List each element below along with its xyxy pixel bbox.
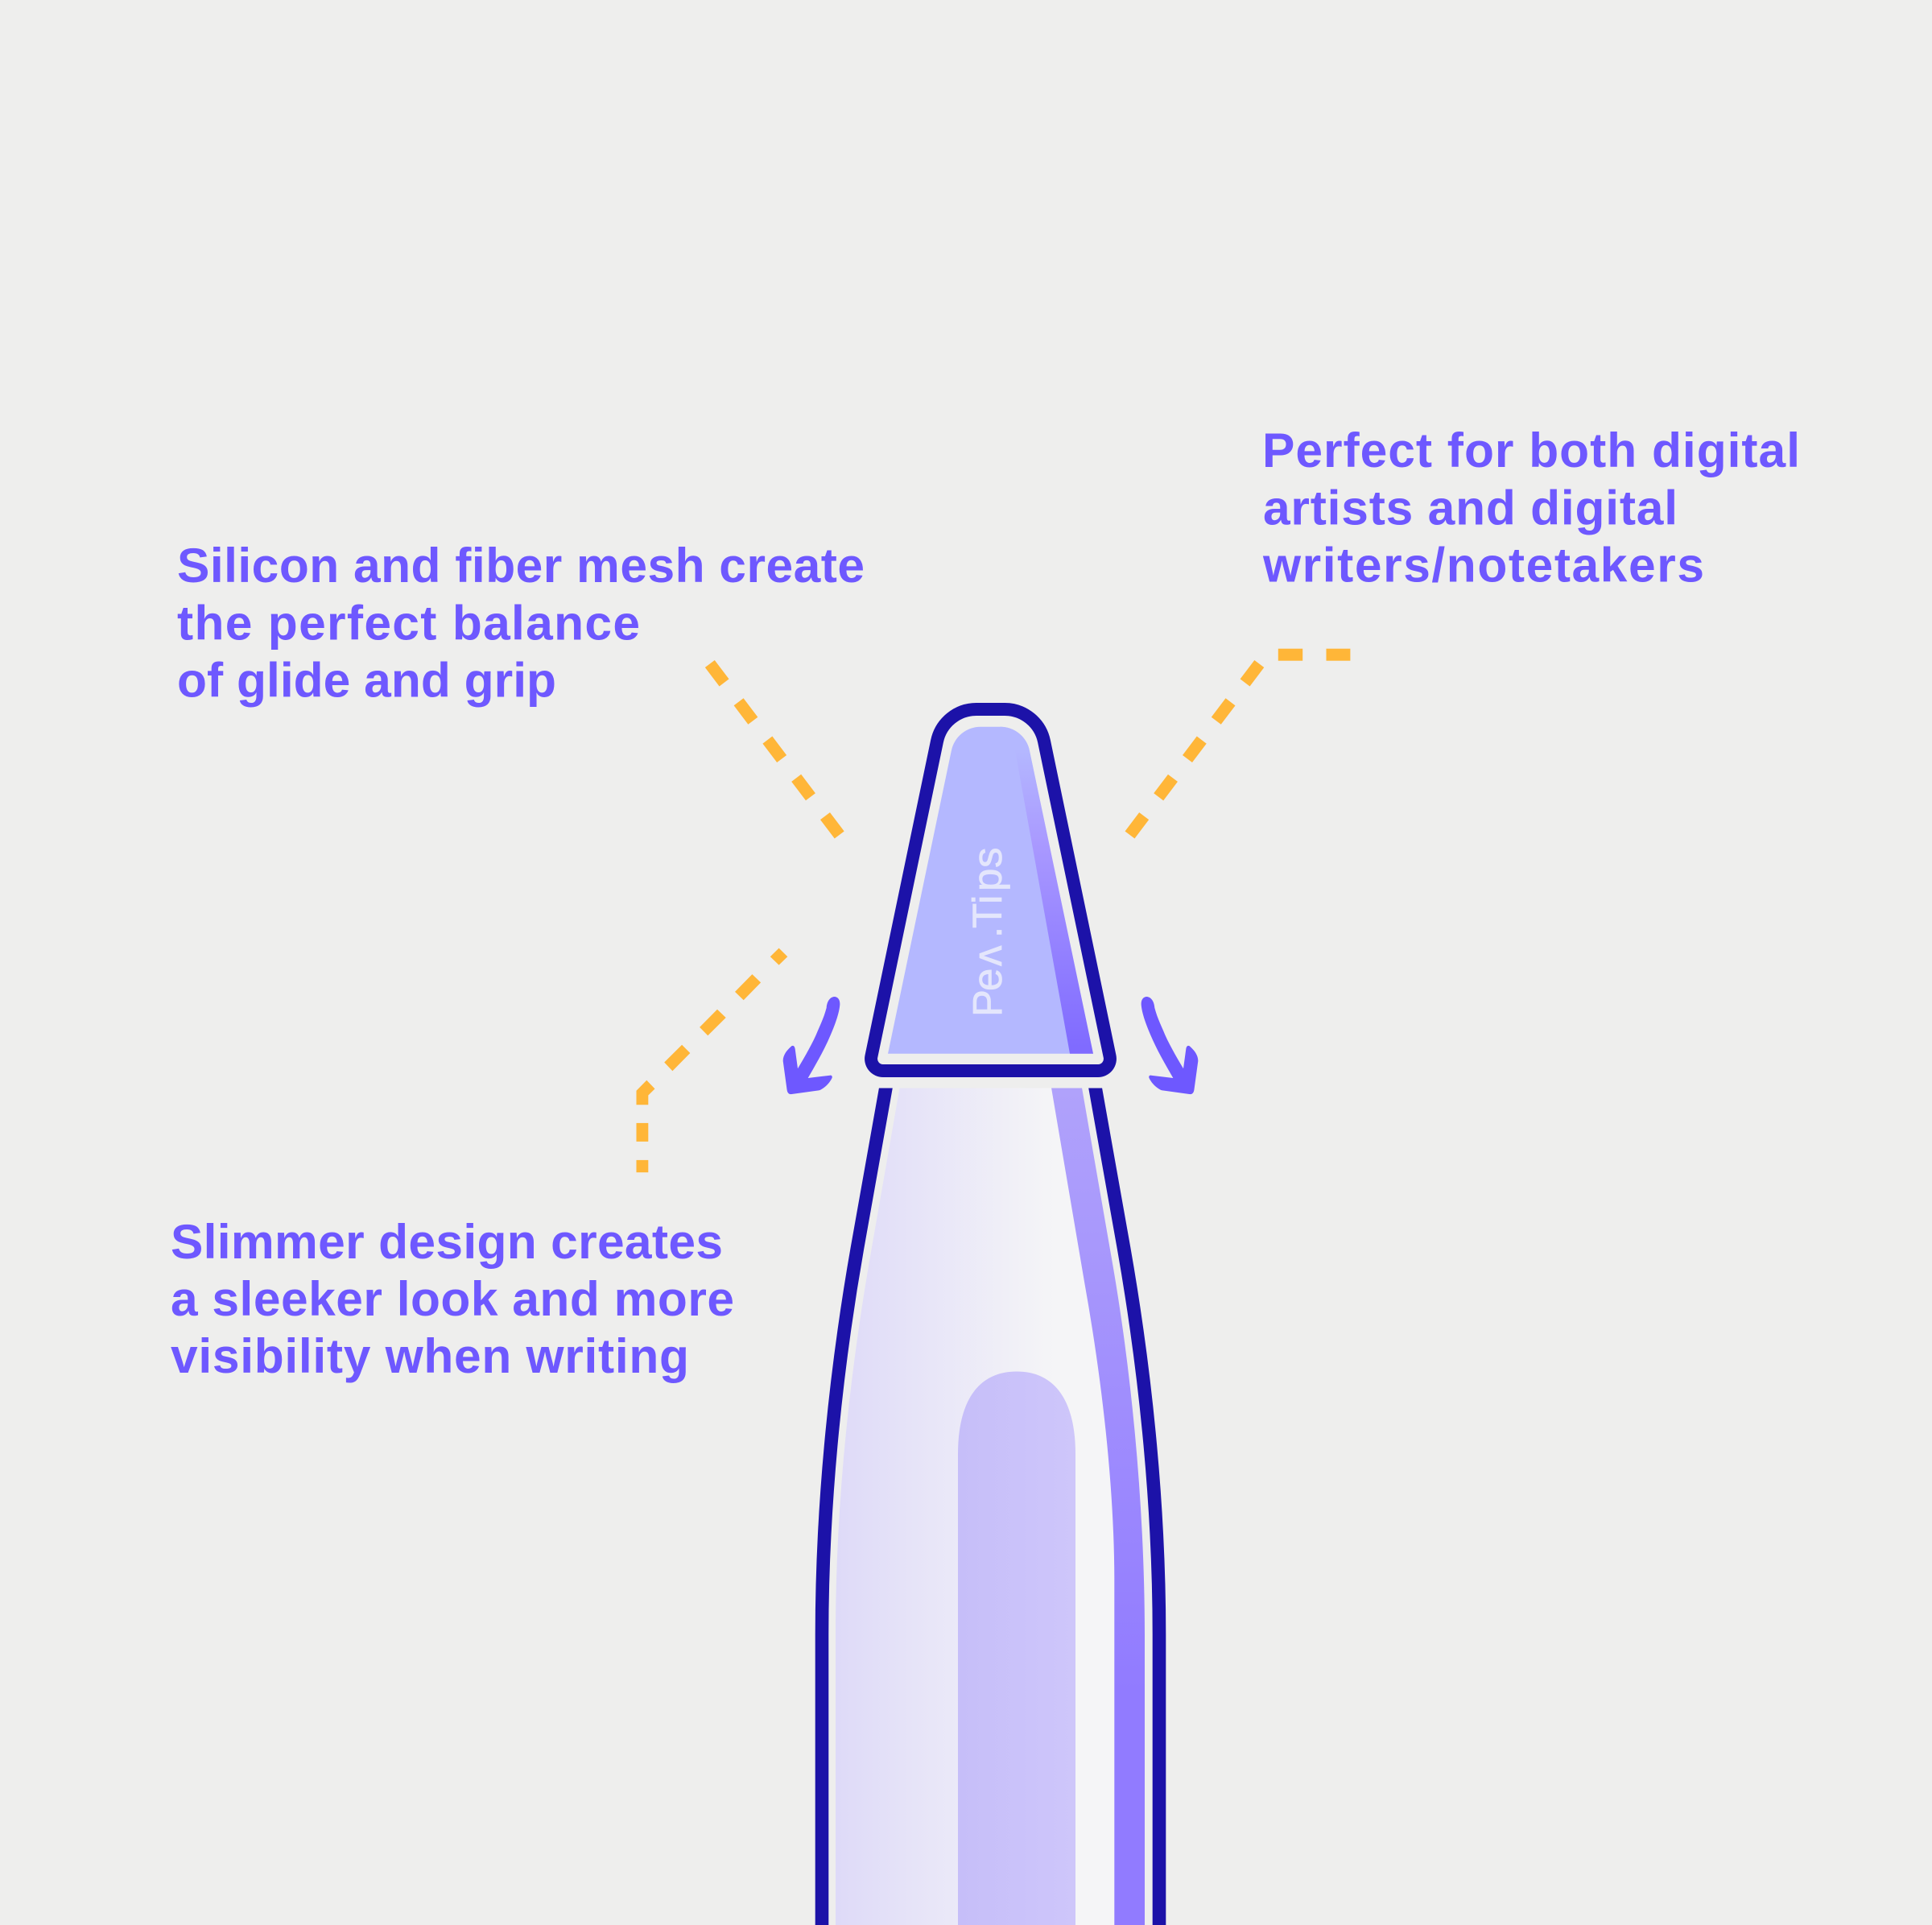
tip shadow strip	[1000, 727, 1093, 1054]
callout: silicon and fiber mesh	[177, 538, 865, 707]
pen barrel	[822, 1072, 1159, 1925]
callout: digital artists and writers: Perfect for both digital	[1262, 423, 1800, 477]
tip outline	[871, 709, 1110, 1071]
barrel body	[836, 1088, 1145, 1925]
callout: digital artists and writers: artists and digital	[1263, 480, 1678, 535]
dashed leader: top left	[710, 663, 840, 835]
barrel shadow strip	[1051, 1088, 1145, 1925]
callout: slimmer design: Slimmer design creates	[171, 1214, 723, 1269]
callout: slimmer design	[171, 1214, 734, 1383]
tip fill	[888, 727, 1093, 1054]
arrow: left	[783, 997, 840, 1094]
tip logo text: Peʌ.Tips	[964, 847, 1010, 1017]
callout: silicon and fiber mesh: the perfect balance	[177, 595, 640, 650]
callout: silicon and fiber mesh: of glide and grip	[177, 652, 556, 707]
callout: slimmer design: visibility when writing	[171, 1328, 689, 1383]
barrel highlight pill	[958, 1372, 1075, 1925]
callout: silicon and fiber mesh: Silicon and fiber mesh create	[177, 538, 865, 593]
callout: slimmer design: a sleeker look and more	[171, 1271, 734, 1326]
barrel left outline	[822, 1072, 889, 1925]
pen tip	[871, 709, 1110, 1071]
callout: digital artists and writers: writers/notetakers	[1262, 537, 1704, 592]
barrel right outline	[1092, 1072, 1159, 1925]
arrow: right	[1141, 997, 1198, 1094]
callout: digital artists and writers	[1262, 423, 1800, 592]
dashed leader: top right	[1130, 649, 1350, 835]
dashed leader: lower left	[636, 948, 787, 1172]
